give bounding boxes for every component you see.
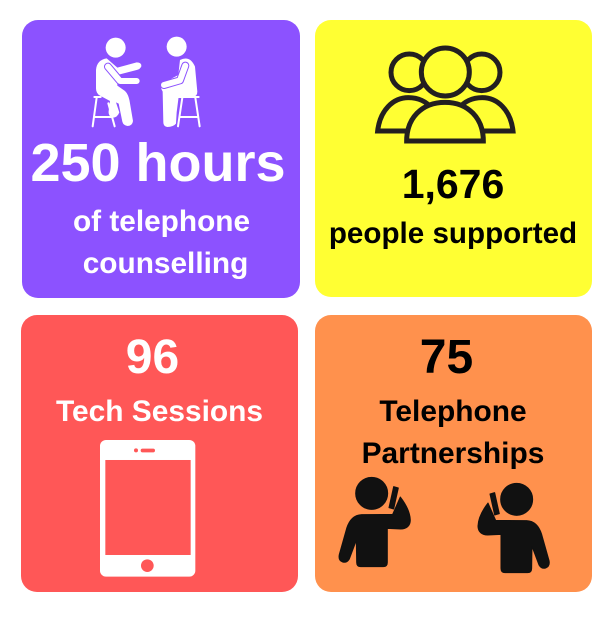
text: of telephone: of telephone <box>73 205 250 238</box>
headline: 250 hours: 250 hours <box>30 133 286 193</box>
headline: 75: 75 <box>420 331 473 384</box>
icon: person on phone, left <box>339 477 410 567</box>
icon: two people sitting in conversation <box>93 37 200 127</box>
text: Partnerships: Partnerships <box>362 437 544 470</box>
panel: people supported <box>315 20 592 297</box>
left person <box>93 38 141 126</box>
panel: telephone counselling <box>22 20 300 298</box>
icon: smartphone <box>100 440 195 577</box>
headline: 1,676: 1,676 <box>402 161 504 207</box>
panel background red <box>21 315 298 592</box>
icon: person on phone, right <box>478 483 549 573</box>
icon: group of three people <box>378 48 513 141</box>
text: people supported: people supported <box>329 217 577 250</box>
text: counselling: counselling <box>83 247 248 280</box>
text: Tech Sessions: Tech Sessions <box>56 395 263 428</box>
headline: 96: 96 <box>126 331 179 384</box>
text: Telephone: Telephone <box>379 395 527 428</box>
panel: telephone partnerships <box>315 315 592 592</box>
panel background orange <box>315 315 592 592</box>
panel background yellow <box>315 20 592 297</box>
panel background purple <box>22 20 300 298</box>
right person <box>161 37 200 127</box>
panel: tech sessions <box>21 315 298 592</box>
